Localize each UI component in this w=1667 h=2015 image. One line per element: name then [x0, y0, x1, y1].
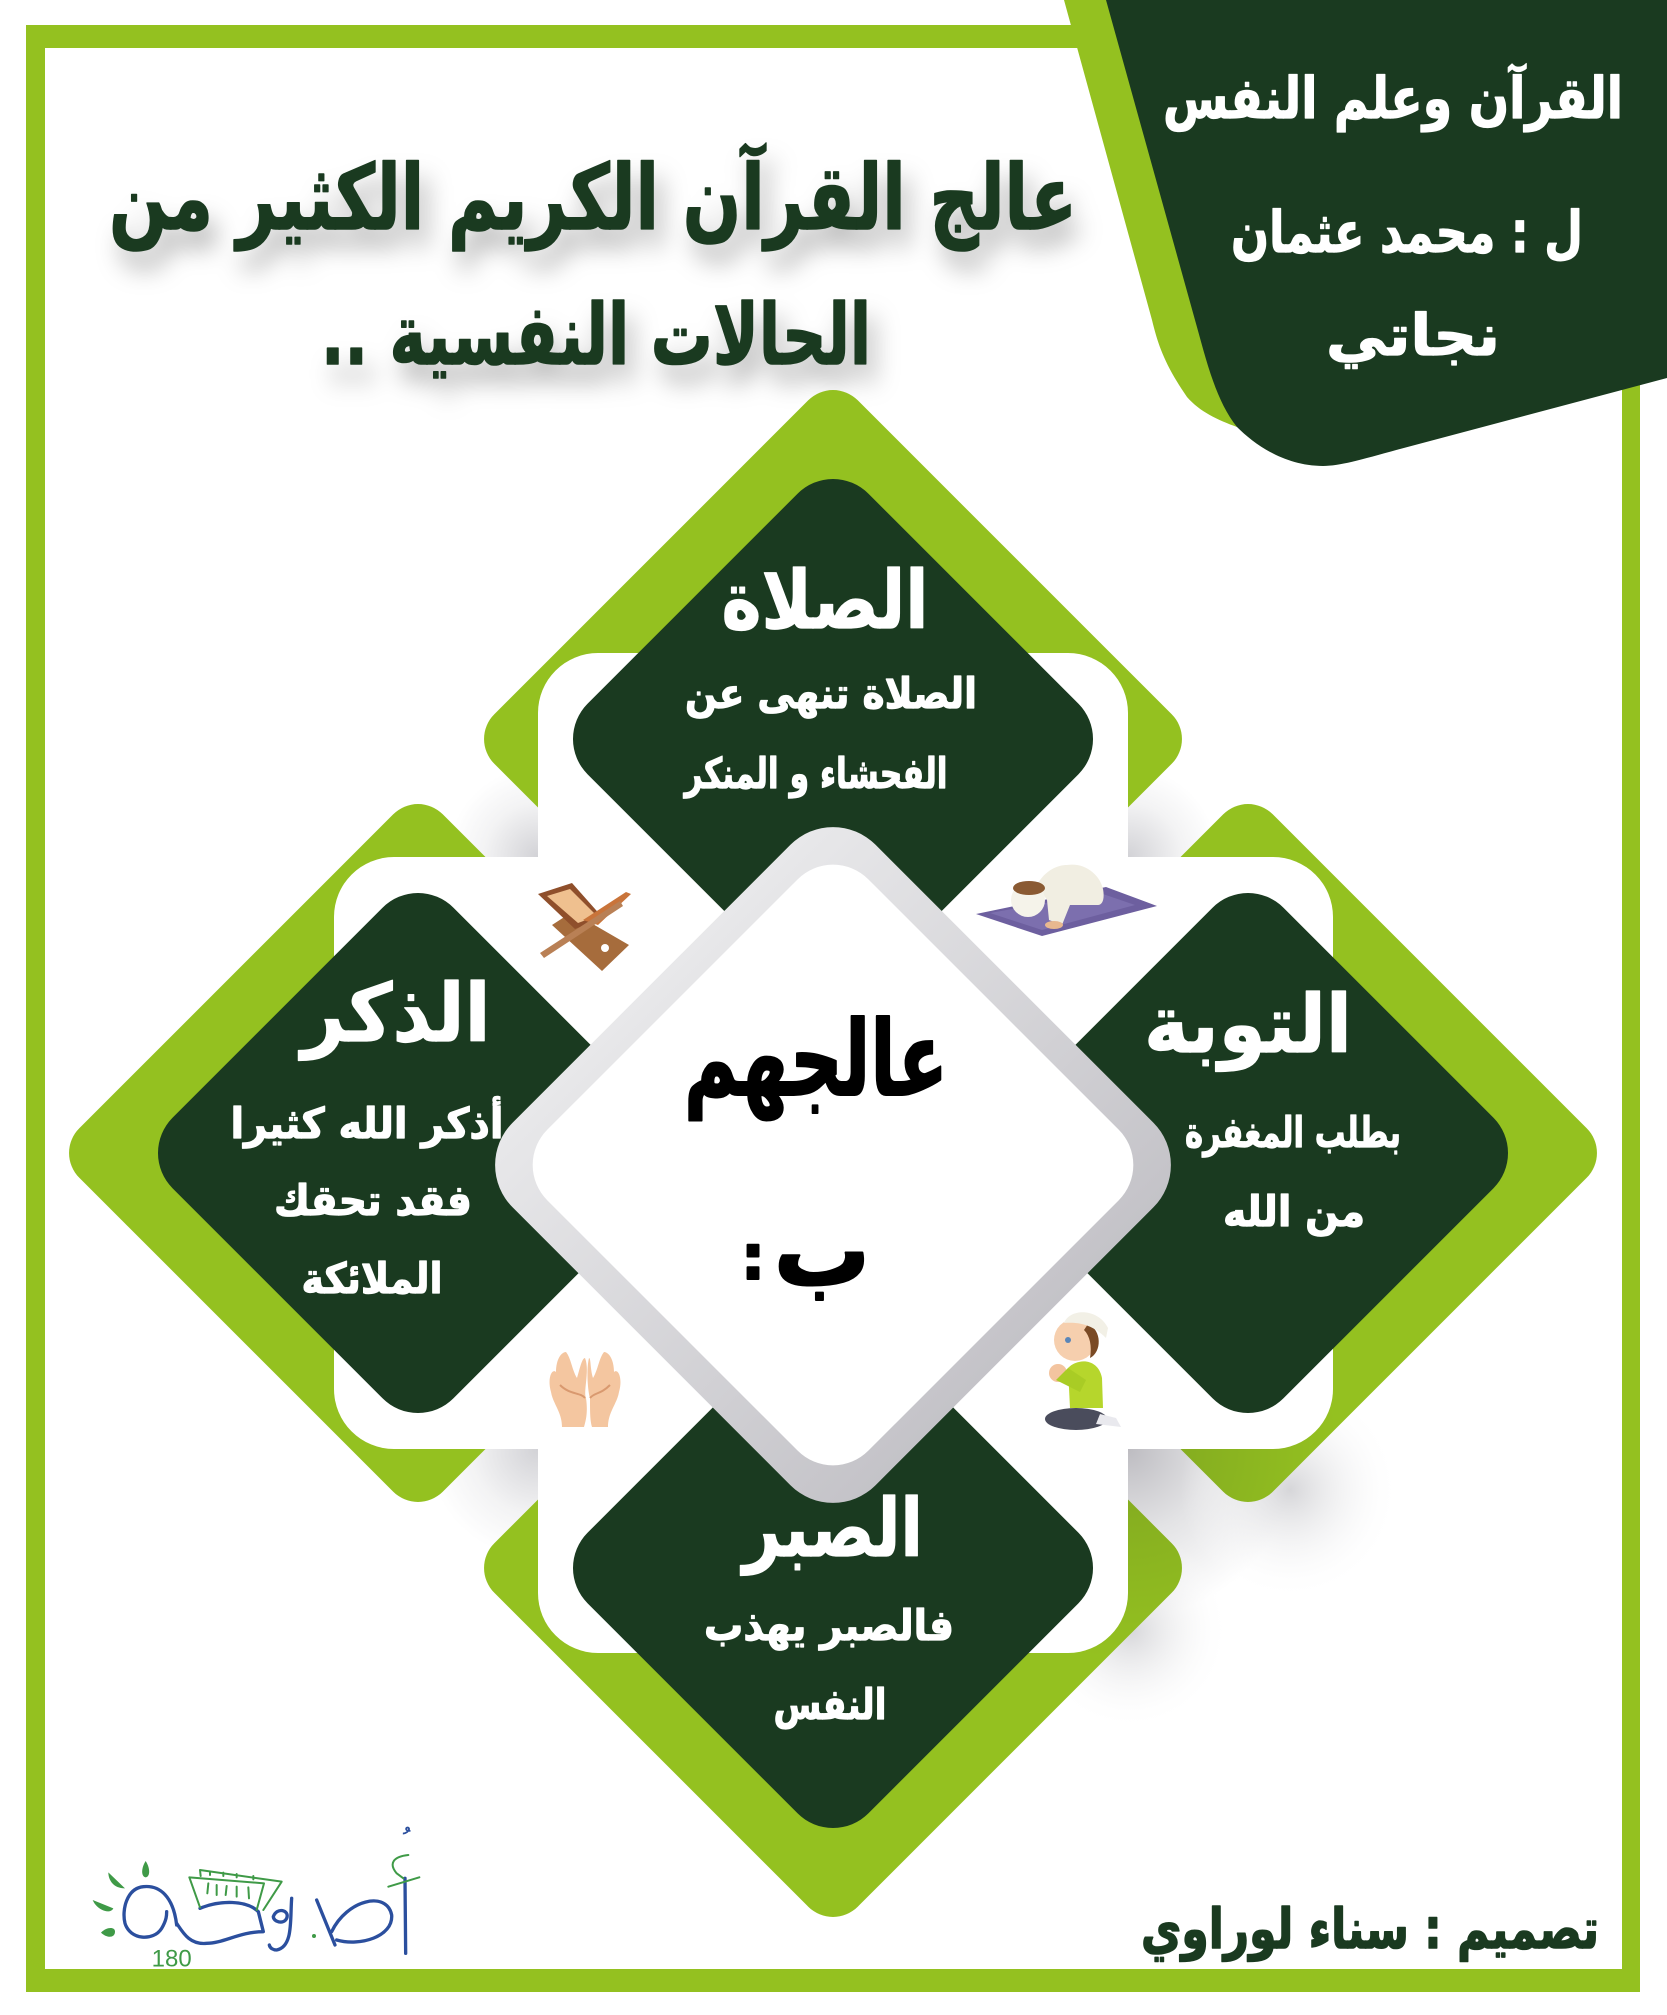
center text line 2: ب: [774, 1192, 870, 1309]
center text line 2: :: [741, 1221, 765, 1294]
panel: patience: [552, 1287, 1114, 1849]
repentance text line 1: بطلب المغفرة: [1185, 1108, 1401, 1158]
prayer text line 2: الفحشاء و المنكر: [683, 749, 948, 799]
prayer heading: الصلاة: [722, 554, 928, 647]
patience heading: الصبر: [740, 1482, 923, 1576]
title line 2: الحالات النفسية ..: [321, 286, 871, 384]
repentance heading: التوبة: [1144, 978, 1352, 1072]
remembrance text line 2: فقد تحقك: [274, 1176, 472, 1225]
panel: prayer: [552, 458, 1114, 1020]
logo sun leaves: [93, 1861, 316, 1938]
logo damma: ُ: [402, 1826, 411, 1834]
white cross card: [334, 653, 1333, 1653]
title line 1: عالج القرآن الكريم الكثير من: [109, 143, 1077, 251]
banner line 3: نجاتي: [1326, 303, 1500, 369]
green diamonds: [55, 376, 1611, 1931]
remembrance text line 3: الملائكة: [302, 1254, 442, 1303]
corner shadows: [428, 767, 1400, 1730]
center diamond: [470, 802, 1196, 1528]
logo number: 180: [152, 1946, 192, 1973]
icon: man prostrating on mat: [976, 865, 1157, 936]
icon: boy praying: [1045, 1312, 1121, 1430]
panel: remembrance: [137, 872, 699, 1434]
logo lettering strokes: [124, 1878, 406, 1953]
remembrance text line 1: أذكر الله كثيرا: [230, 1096, 504, 1149]
patience text line 2: النفس: [774, 1680, 886, 1729]
header banner: [1064, 0, 1667, 466]
patience text line 1: فالصبر يهذب: [704, 1601, 954, 1651]
logo building strokes: [189, 1855, 419, 1910]
main title: [109, 143, 1077, 384]
logo: [93, 1826, 419, 1973]
center text line 1: عالجهم: [684, 998, 948, 1121]
panel: repentance: [967, 872, 1529, 1434]
icon: quran on stand: [538, 883, 631, 971]
icon: open praying hands: [550, 1352, 620, 1427]
prayer text line 1: الصلاة تنهى عن: [685, 669, 977, 719]
remembrance heading: الذكر: [298, 967, 490, 1061]
repentance text line 2: من الله: [1223, 1187, 1365, 1237]
